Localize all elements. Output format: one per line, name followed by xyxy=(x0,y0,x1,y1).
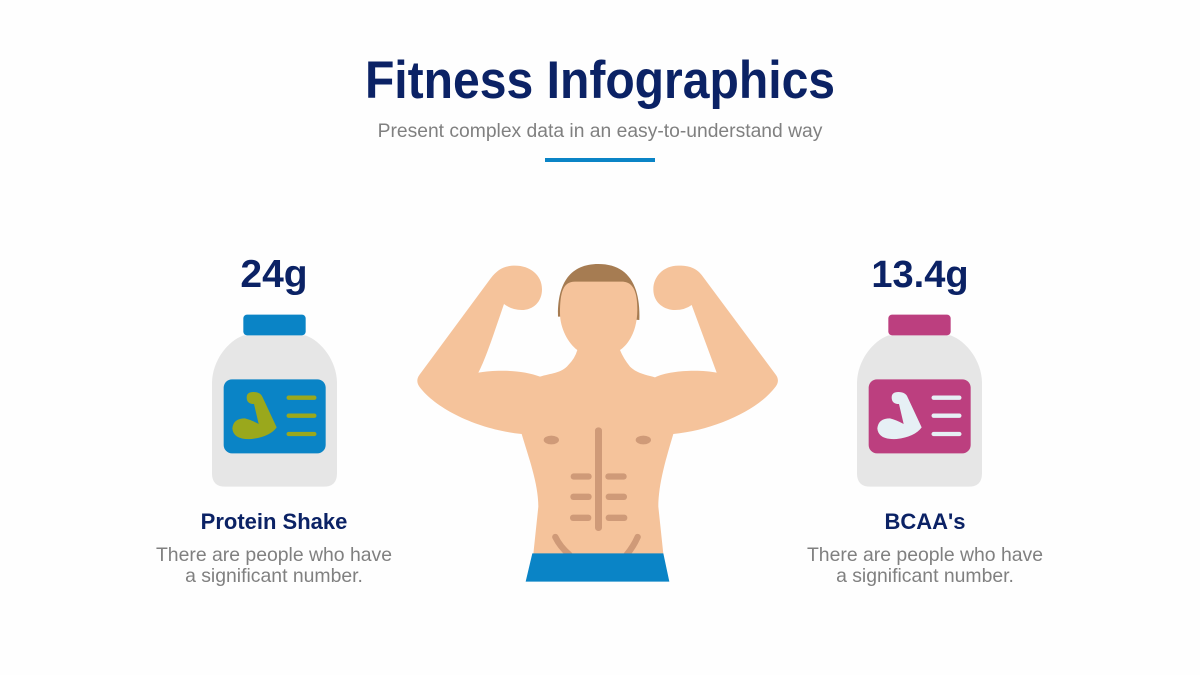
hair xyxy=(558,264,639,320)
label: Protein Shake: Protein Shake xyxy=(201,509,347,534)
icon: BCAA bottle xyxy=(857,314,982,486)
description: right: There are people who have xyxy=(807,544,1043,566)
icon: protein shake bottle xyxy=(212,314,337,486)
value: 24g: 24g xyxy=(240,253,308,296)
value: 13.4g: 13.4g xyxy=(871,254,969,296)
description: left: a significant number. xyxy=(185,565,363,587)
subtitle: Present complex data in an easy-to-understand way xyxy=(378,121,822,142)
label: BCAA's: BCAA's xyxy=(884,509,966,534)
title underline xyxy=(545,158,655,162)
title: Fitness Infographics xyxy=(365,51,835,110)
description: left: There are people who have xyxy=(156,544,392,566)
description: right xyxy=(807,544,1043,587)
description: right: a significant number. xyxy=(836,565,1014,587)
shorts xyxy=(526,553,669,582)
description: left xyxy=(156,544,392,587)
body xyxy=(417,266,778,554)
icon: flexing man xyxy=(417,264,778,582)
abs and chest lines xyxy=(544,427,651,531)
